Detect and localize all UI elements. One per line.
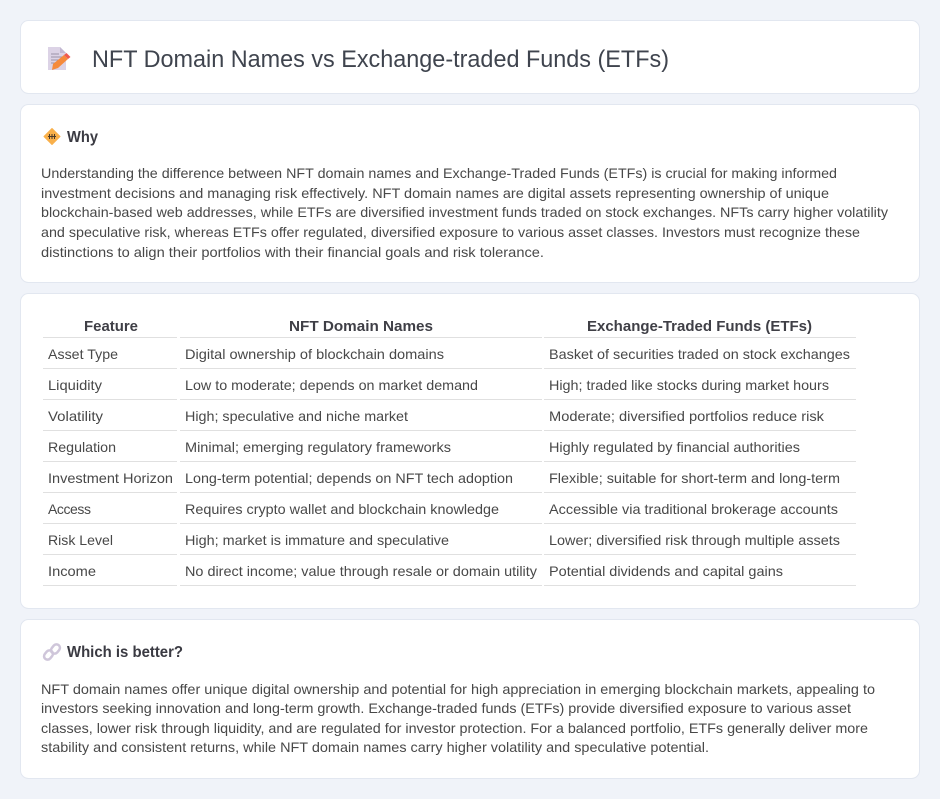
text block: which is better: investors seeking innovation and long-term growth. Exchange-traded funds (ETFs) provide diversified exposure to various asset [41,700,851,716]
row: asset type: Digital ownership of blockchain domains [185,346,444,362]
row: access: Requires crypto wallet and blockchain knowledge [185,501,499,517]
table header: NFT Domain Names [289,318,433,335]
text block: why: blockchain-based web addresses, while ETFs are diversified investment funds traded on stock exchanges. NFTs carry higher volatility [41,204,888,220]
row: income: Income [48,563,96,579]
text block: which is better: classes, lower risk through liquidity, and are regulated for investor protection. For a balanced portfolio, ETFs generally deliver more [41,720,868,736]
row: regulation: Minimal; emerging regulatory frameworks [185,439,451,455]
panel: comparison table [20,294,920,608]
row: volatility [48,408,825,424]
text block: which is better [41,681,875,755]
icon: link [43,643,61,661]
icon: document with pencil [48,47,70,70]
row: regulation: Highly regulated by financial authorities [549,439,800,455]
text block: why: and speculative risk, whereas ETFs offer regulated, diversified exposure to various asset classes. Investors must recognize these [41,224,860,240]
row: liquidity: Low to moderate; depends on market demand [185,377,478,393]
row: investment horizon [48,470,840,486]
row: liquidity: Liquidity [48,377,102,393]
row: volatility: High; speculative and niche market [185,408,408,424]
row: risk level [48,532,840,548]
text block: which is better: NFT domain names offer unique digital ownership and potential for high appreciation in emerging blockchain markets, appealing to [41,681,875,697]
heading: which is better: Which is better? [67,644,183,661]
row: income: Potential dividends and capital gains [549,563,783,579]
panel: which is better [20,620,920,778]
row: access: Access [48,501,91,517]
icon: diamond sign [44,128,60,144]
row: regulation [48,439,800,455]
row: volatility: Volatility [48,408,103,424]
row: asset type [48,346,850,362]
table header: Feature [84,318,138,335]
row: risk level: Lower; diversified risk through multiple assets [549,532,840,548]
text block: why [41,165,888,260]
row: access [48,501,838,517]
row: investment horizon: Investment Horizon [48,470,173,486]
heading: why: Why [67,129,98,146]
text block: why: investment decisions and managing risk effectively. NFT domain names are digital assets representing ownership of unique [41,185,829,201]
row: regulation: Regulation [48,439,116,455]
row: asset type: Basket of securities traded on stock exchanges [549,346,850,362]
row: volatility: Moderate; diversified portfolios reduce risk [549,408,825,424]
panel: why [20,104,920,282]
table header: Exchange-Traded Funds (ETFs) [587,318,812,335]
panel: header [20,20,920,94]
row: income: No direct income; value through resale or domain utility [185,563,537,579]
row: investment horizon: Flexible; suitable for short-term and long-term [549,470,840,486]
text block: why: Understanding the difference between NFT domain names and Exchange-Traded Funds (ETFs) is crucial for making informed [41,165,837,181]
row: risk level: Risk Level [48,532,113,548]
row: investment horizon: Long-term potential; depends on NFT tech adoption [185,470,513,486]
text block: which is better: stability and consistent returns, while NFT domain names carry higher volatility and speculative potential. [41,739,709,755]
row: liquidity: High; traded like stocks during market hours [549,377,829,393]
row: access: Accessible via traditional brokerage accounts [549,501,838,517]
row: asset type: Asset Type [48,346,118,362]
row: liquidity [48,377,829,393]
table header [84,318,812,335]
text block: why: distinctions to align their portfolios with their financial goals and risk tolerance. [41,244,544,260]
row: income [48,563,783,579]
row: risk level: High; market is immature and speculative [185,532,449,548]
title: NFT Domain Names vs Exchange-traded Funds (ETFs) [92,46,669,73]
